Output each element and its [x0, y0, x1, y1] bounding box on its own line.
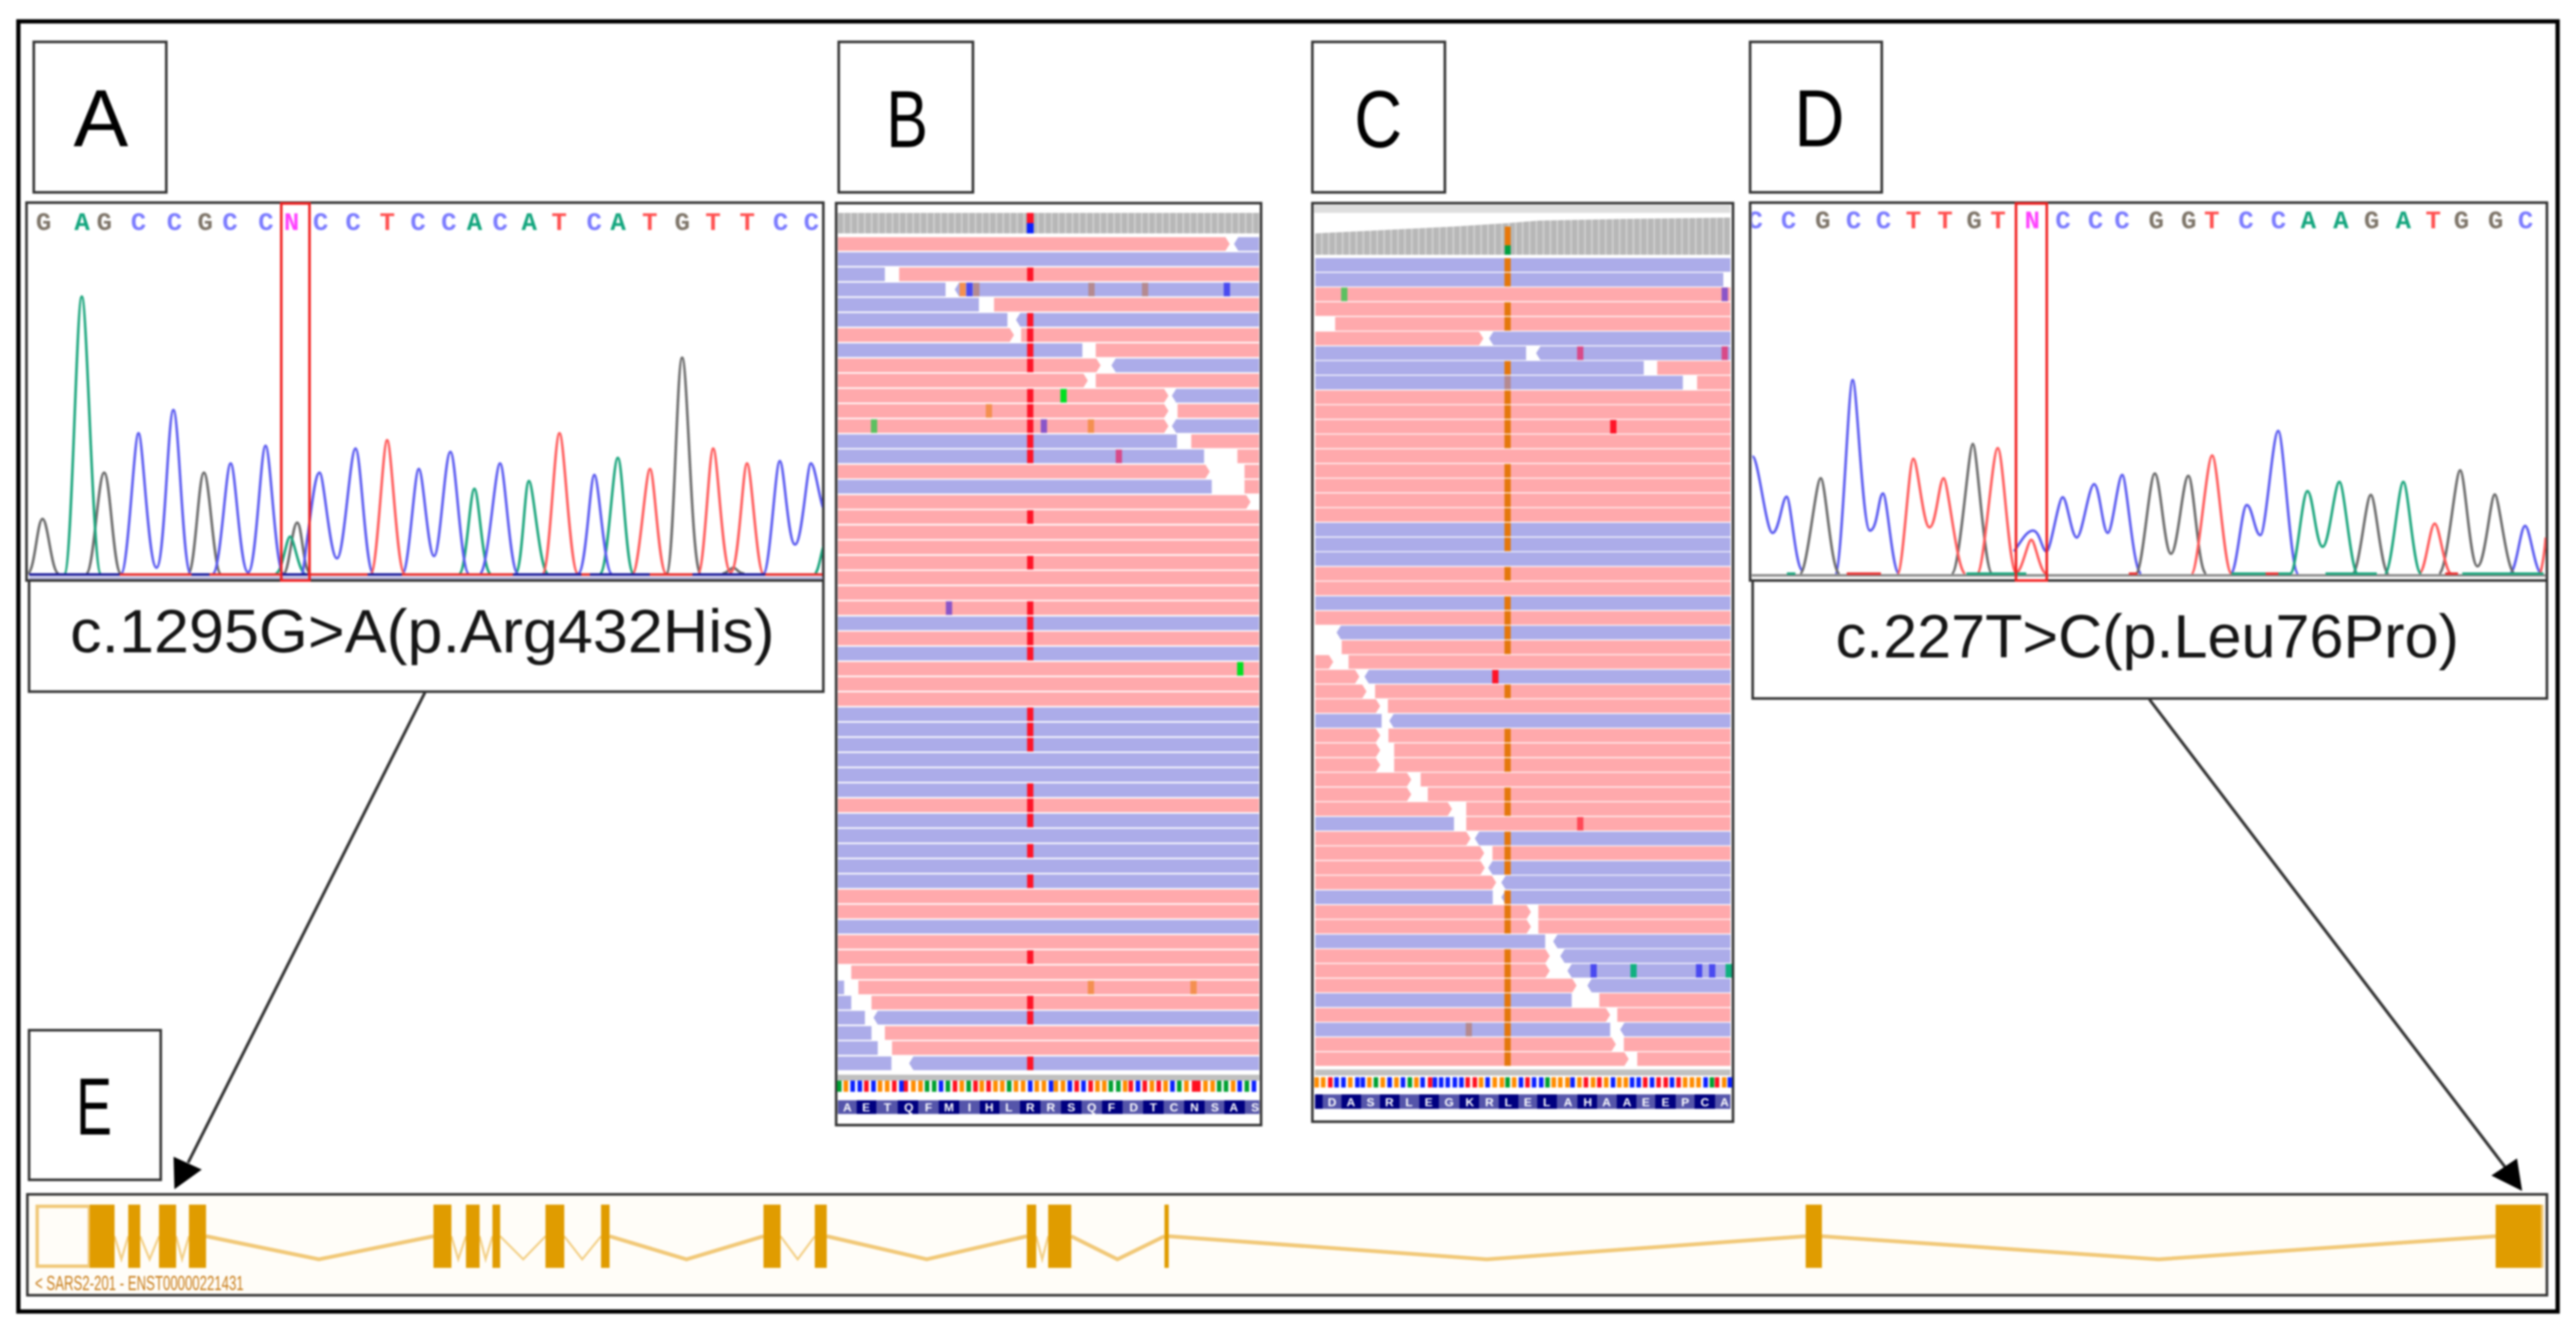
base call sequence A: C: [131, 209, 146, 239]
base call sequence A: A: [467, 209, 482, 239]
base call sequence D: T: [1990, 208, 2006, 237]
amino acid strip C: K: [1465, 1095, 1474, 1109]
label box B: B: [886, 74, 928, 165]
label box E: [29, 1030, 161, 1180]
base call sequence A: C: [441, 209, 457, 239]
label box A: A: [74, 74, 129, 164]
base call sequence A: C: [492, 209, 508, 239]
label box D: [1750, 42, 1882, 192]
aligned reads C: [1315, 258, 1730, 1066]
amino acid strip C: R: [1485, 1095, 1494, 1109]
amino acid strip B: A: [1229, 1100, 1238, 1114]
amino acid strip C: P: [1681, 1095, 1689, 1109]
base call sequence D: C: [2055, 208, 2071, 237]
amino acid strip C: S: [1366, 1095, 1375, 1109]
amino acid strip C: E: [1524, 1095, 1532, 1109]
base call sequence A: G: [97, 209, 112, 239]
alignment frame B: [836, 203, 1261, 1125]
chromatogram frame D: [1750, 203, 2547, 581]
amino acid strip C: E: [1424, 1095, 1433, 1109]
chromatogram frame A: [27, 203, 823, 581]
base call sequence A: G: [197, 209, 213, 239]
base call sequence A: A: [74, 209, 90, 239]
base call sequence D: G: [2149, 208, 2164, 237]
base call sequence D: C: [2088, 208, 2103, 237]
base call sequence A: T: [380, 209, 395, 239]
amino acid strip B: R: [1046, 1100, 1055, 1114]
amino acid strip B: L: [1005, 1100, 1013, 1114]
arrow: A to gene: [174, 693, 425, 1189]
base call sequence D: G: [2181, 208, 2196, 237]
amino acid strip C: E: [1642, 1095, 1650, 1109]
base call sequence D: C: [1876, 208, 1891, 237]
base call sequence A: C: [167, 209, 182, 239]
amino acid strip B: T: [1150, 1100, 1158, 1114]
amino acid strip C: [1315, 1094, 1730, 1109]
nucleotide strip B: [840, 1081, 1254, 1092]
red highlight box D: [2016, 203, 2047, 581]
base call sequence D: T: [1937, 208, 1953, 237]
red highlight box A: [281, 203, 309, 581]
amino acid strip B: H: [985, 1100, 993, 1114]
base call sequence D: T: [2426, 208, 2441, 237]
panel D: chromatogram: [1748, 42, 2547, 698]
base call sequence A: T: [642, 209, 657, 239]
amino acid strip C: L: [1505, 1095, 1512, 1109]
introns: [115, 1236, 2496, 1259]
amino acid strip B: S: [1067, 1100, 1076, 1114]
amino acid strip B: N: [1190, 1100, 1199, 1114]
amino acid strip B: E: [862, 1100, 870, 1114]
base call sequence A: C: [222, 209, 238, 239]
base call sequence D: A: [2301, 208, 2316, 237]
amino acid strip B: A: [843, 1100, 852, 1114]
reference band C: [1315, 1070, 1730, 1076]
amino acid strip B: I: [968, 1100, 971, 1114]
base call sequence D: A: [2396, 208, 2411, 237]
amino acid strip B: F: [1108, 1100, 1116, 1114]
amino acid strip B: Q: [905, 1100, 914, 1114]
base call sequence D: [1751, 210, 2534, 230]
amino acid strip B: C: [1170, 1100, 1178, 1114]
base call sequence D: T: [1906, 208, 1921, 237]
variant label A: c.1295G>A(p.Arg432His): [70, 598, 775, 666]
base call sequence D: G: [2454, 208, 2469, 237]
panel B: read alignment: [836, 42, 1261, 1125]
base call sequence D: G: [1966, 208, 1982, 237]
alignment frame C: [1312, 203, 1733, 1122]
coverage track B: [838, 213, 1259, 233]
panel C: read alignment: [1312, 42, 1733, 1122]
variant label D: c.227T>C(p.Leu76Pro): [1836, 604, 2459, 671]
amino acid strip B: S: [1251, 1100, 1259, 1114]
trace peaks D: [1753, 380, 2546, 574]
label box C: C: [1354, 74, 1402, 165]
base call sequence A: T: [740, 209, 755, 239]
base call sequence A: T: [705, 209, 721, 239]
amino acid strip C: L: [1406, 1095, 1413, 1109]
base call sequence D: C: [2518, 208, 2533, 237]
amino acid strip C: L: [1543, 1095, 1551, 1109]
amino acid strip C: E: [1661, 1095, 1670, 1109]
base call sequence D: N: [2025, 208, 2040, 237]
amino acid strip C: A: [1347, 1095, 1355, 1109]
base call sequence D: G: [1815, 208, 1830, 237]
baseline A: [29, 575, 822, 578]
base call sequence D: G: [2364, 208, 2379, 237]
base call sequence D: C: [1846, 208, 1861, 237]
base call sequence A: G: [675, 209, 690, 239]
amino acid strip B: S: [1211, 1100, 1219, 1114]
amino acid strip C: H: [1583, 1095, 1592, 1109]
label box E: E: [76, 1062, 112, 1152]
base call sequence D: C: [1781, 208, 1796, 237]
baseline D: [1752, 574, 2546, 575]
base call sequence A: G: [36, 209, 51, 239]
base call sequence A: T: [551, 209, 567, 239]
base call sequence D: G: [2488, 208, 2503, 237]
amino acid strip B: R: [1026, 1100, 1035, 1114]
panel A: chromatogram: [27, 42, 823, 692]
amino acid strip C: R: [1385, 1095, 1394, 1109]
base call sequence D: C: [1748, 208, 1763, 237]
base call sequence D: C: [2114, 208, 2130, 237]
base call sequence D: T: [2204, 208, 2219, 237]
base call sequence A: A: [610, 209, 626, 239]
amino acid strip C: A: [1602, 1095, 1611, 1109]
transcript label: < SARS2-201 - ENST00000221431: [35, 1272, 244, 1295]
amino acid strip B: [838, 1100, 1259, 1114]
coverage track C: [1315, 217, 1730, 255]
base call sequence D: C: [2271, 208, 2286, 237]
base call sequence A: N: [284, 209, 299, 239]
amino acid strip C: A: [1623, 1095, 1631, 1109]
amino acid strip C: C: [1701, 1095, 1709, 1109]
label box D: D: [1794, 74, 1845, 164]
base call sequence A: C: [773, 209, 788, 239]
label box C: [1312, 42, 1445, 192]
amino acid strip B: T: [884, 1100, 892, 1114]
base call sequence A: C: [313, 209, 328, 239]
panel E: gene model: [27, 1030, 2547, 1295]
base call sequence A: C: [410, 209, 426, 239]
arrow: D to gene: [2149, 699, 2522, 1191]
base call sequence D: C: [2238, 208, 2254, 237]
reference band B: [838, 1075, 1259, 1081]
nucleotide strip C: [1317, 1077, 1730, 1087]
top band C: [1314, 205, 1730, 213]
base call sequence D: A: [2333, 208, 2349, 237]
amino acid strip C: A: [1720, 1095, 1729, 1109]
amino acid strip B: D: [1129, 1100, 1138, 1114]
exons: [38, 1205, 2544, 1268]
amino acid strip C: D: [1328, 1095, 1336, 1109]
base call sequence A: C: [345, 209, 361, 239]
base call sequence A: C: [258, 209, 274, 239]
amino acid strip C: A: [1564, 1095, 1572, 1109]
variant label D: [1753, 581, 2547, 698]
base call sequence A: A: [522, 209, 537, 239]
amino acid strip B: M: [944, 1100, 954, 1114]
label box B: [839, 42, 973, 192]
aligned reads B: [838, 237, 1259, 1070]
amino acid strip B: F: [925, 1100, 933, 1114]
gene track frame: [27, 1194, 2547, 1295]
base call sequence A: C: [587, 209, 602, 239]
variant label A: [29, 581, 823, 692]
amino acid strip C: G: [1445, 1095, 1454, 1109]
amino acid strip B: Q: [1088, 1100, 1097, 1114]
base call sequence A: C: [804, 209, 819, 239]
label box A: [34, 42, 166, 192]
trace peaks A: [27, 297, 823, 574]
